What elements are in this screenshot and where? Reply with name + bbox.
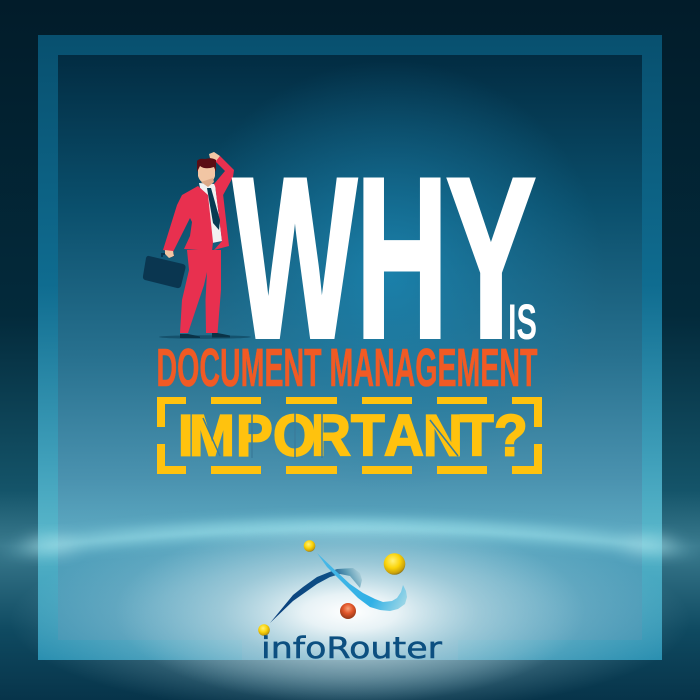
panel: inner square <box>58 55 642 660</box>
jacket right side <box>214 184 229 250</box>
title: WHY <box>233 130 536 386</box>
letter H: H <box>356 130 448 386</box>
logo wordmark: infoRouter <box>261 631 442 665</box>
panel: outer frame <box>38 35 662 660</box>
stencil cuts <box>203 412 458 458</box>
neck and face <box>198 166 215 184</box>
letter W: W <box>233 130 357 386</box>
left hand <box>165 250 174 258</box>
tie <box>207 188 220 230</box>
logo dark swoosh <box>270 568 362 623</box>
blue centre glow <box>58 55 642 640</box>
raised arm <box>214 156 234 197</box>
hair <box>197 158 216 172</box>
wide pale glow <box>10 525 690 700</box>
logo ball orange <box>340 603 356 619</box>
shoes <box>180 333 230 338</box>
logo ball large <box>384 553 405 575</box>
heading: Important?: IMPORTANT? <box>178 403 528 468</box>
illustration: businessman <box>143 152 251 339</box>
briefcase <box>143 254 186 288</box>
title: IS: IS <box>508 294 537 350</box>
left lens flare <box>24 538 76 552</box>
horizon glow band <box>0 527 700 552</box>
logo ball top <box>304 540 315 552</box>
logo: infoRouter <box>258 540 442 665</box>
shirt <box>199 183 222 243</box>
logo ball bottom <box>258 624 270 636</box>
callout: dashed bracket frame <box>157 397 542 474</box>
right lens flare <box>624 538 676 552</box>
horizon bright line <box>30 529 670 548</box>
hand on head <box>209 152 220 161</box>
jacket <box>163 186 213 252</box>
logo light swoosh <box>317 553 407 611</box>
letter Y: Y <box>446 130 536 386</box>
collar shadow <box>201 178 214 187</box>
trousers <box>180 250 221 333</box>
floor shadow <box>159 335 251 339</box>
white centre glow <box>80 500 620 700</box>
